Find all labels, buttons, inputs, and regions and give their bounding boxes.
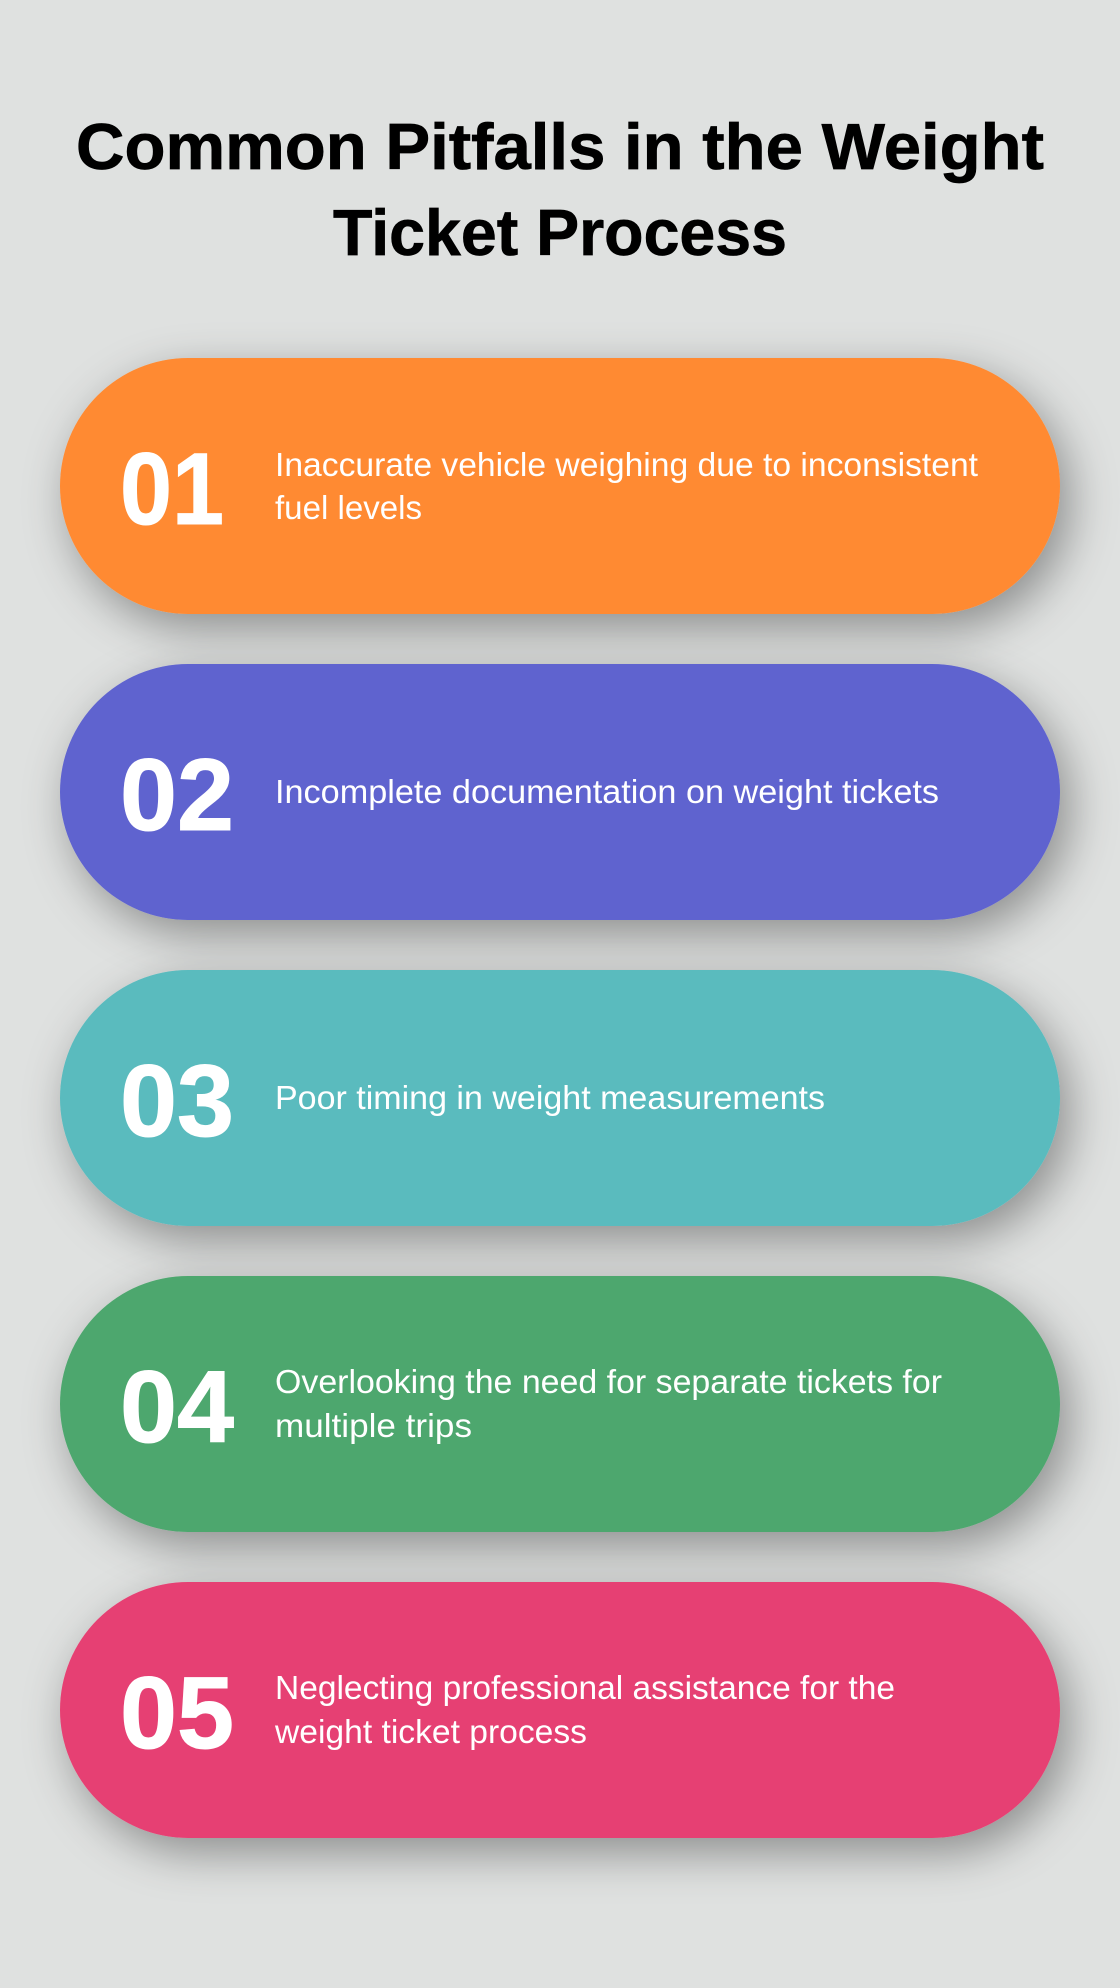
panel: pitfall 03 — [60, 970, 1060, 1226]
text block 05 — [274, 1669, 895, 1750]
number 04: 04 — [120, 1350, 234, 1464]
pill background green — [60, 1276, 1060, 1532]
number 03: 03 — [120, 1044, 234, 1158]
pill background blue — [60, 664, 1060, 920]
panel: pitfall 02 — [60, 664, 1060, 920]
text block 04: multiple trips — [275, 1407, 472, 1444]
panel: pitfall 05 — [60, 1582, 1060, 1838]
panel: pitfall 01 — [60, 358, 1060, 614]
panel: pitfall 04 — [60, 1276, 1060, 1532]
pill background pink — [60, 1582, 1060, 1838]
text block 05: weight ticket process — [274, 1713, 587, 1750]
pill background orange — [60, 358, 1060, 614]
number 01: 01 — [120, 432, 224, 546]
title: Common Pitfalls in the Weight — [76, 110, 1044, 183]
title: Ticket Process — [333, 196, 787, 269]
text block 01: Inaccurate vehicle weighing due to inconsistent — [275, 446, 978, 483]
text block 01: fuel levels — [275, 489, 422, 526]
text block 04 — [275, 1363, 942, 1444]
pill background teal — [60, 970, 1060, 1226]
text block 01 — [275, 446, 978, 526]
text block 02: Incomplete documentation on weight tickets — [275, 773, 939, 810]
text block 03: Poor timing in weight measurements — [275, 1079, 825, 1116]
text block 05: Neglecting professional assistance for the — [275, 1669, 895, 1706]
number 02: 02 — [120, 738, 234, 852]
title — [76, 110, 1044, 269]
text block 04: Overlooking the need for separate tickets for — [275, 1363, 942, 1400]
number 05: 05 — [120, 1656, 234, 1770]
